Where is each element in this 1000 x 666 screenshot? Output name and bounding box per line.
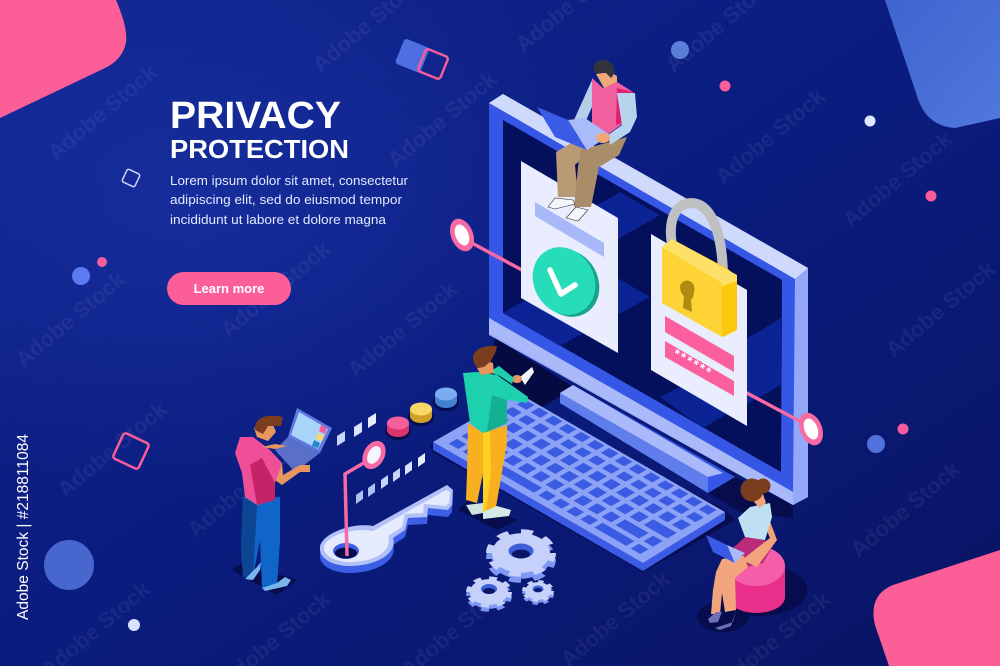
watermarks: Adobe Stock (383, 66, 502, 172)
decorative shapes (44, 38, 936, 631)
title: PRIVACY (170, 95, 341, 137)
watermarks: Adobe Stock (11, 266, 130, 372)
pink connector right (745, 392, 828, 449)
blob: top-left pink (0, 0, 126, 118)
title (170, 95, 349, 164)
dash squares row upper (337, 413, 376, 446)
document with password: ****** (670, 346, 716, 380)
blob: bottom-right pink (873, 550, 1000, 666)
body text: Lorem ipsum dolor sit amet, consectetur (170, 173, 409, 188)
body text: incididunt ut labore et dolore magna (170, 212, 387, 227)
color buttons row (385, 388, 459, 440)
gear medium (468, 578, 510, 610)
gear small (524, 581, 552, 604)
adobe stock id: Adobe Stock | #218811084 (15, 434, 32, 620)
watermarks: Adobe Stock (711, 83, 830, 189)
person on monitor with laptop (537, 60, 637, 221)
stool shadow (697, 564, 807, 632)
watermarks: Adobe Stock (216, 236, 335, 342)
body text (170, 173, 409, 227)
watermarks: Adobe Stock (846, 456, 965, 562)
keyboard shadow (430, 400, 735, 572)
padlock (662, 203, 737, 337)
seated woman with laptop (706, 478, 785, 630)
document with password (651, 234, 747, 426)
watermarks: Adobe Stock (183, 436, 302, 542)
gear large (490, 532, 552, 580)
pink connector left (445, 215, 522, 270)
button: learn more: Learn more (194, 281, 264, 296)
key pin (345, 437, 390, 556)
watermarks: Adobe Stock (43, 59, 162, 165)
watermarks: Adobe Stock (343, 276, 462, 382)
document with check mark (521, 161, 618, 353)
watermarks: Adobe Stock (838, 126, 957, 232)
keyboard (433, 393, 725, 571)
watermarks: Adobe Stock (53, 396, 172, 502)
title: PROTECTION (170, 134, 349, 164)
blob: top-right blue (885, 0, 1000, 128)
watermarks: Adobe Stock (881, 256, 1000, 362)
monitor stand (560, 385, 735, 493)
body text: adipiscing elit, sed do eiusmod tempor (170, 192, 403, 207)
dash squares row lower (356, 453, 425, 504)
person in teal with phone (458, 346, 534, 530)
monitor (488, 94, 808, 518)
button: learn more (167, 272, 291, 305)
person in pink with laptop (232, 408, 332, 595)
key (320, 485, 453, 573)
